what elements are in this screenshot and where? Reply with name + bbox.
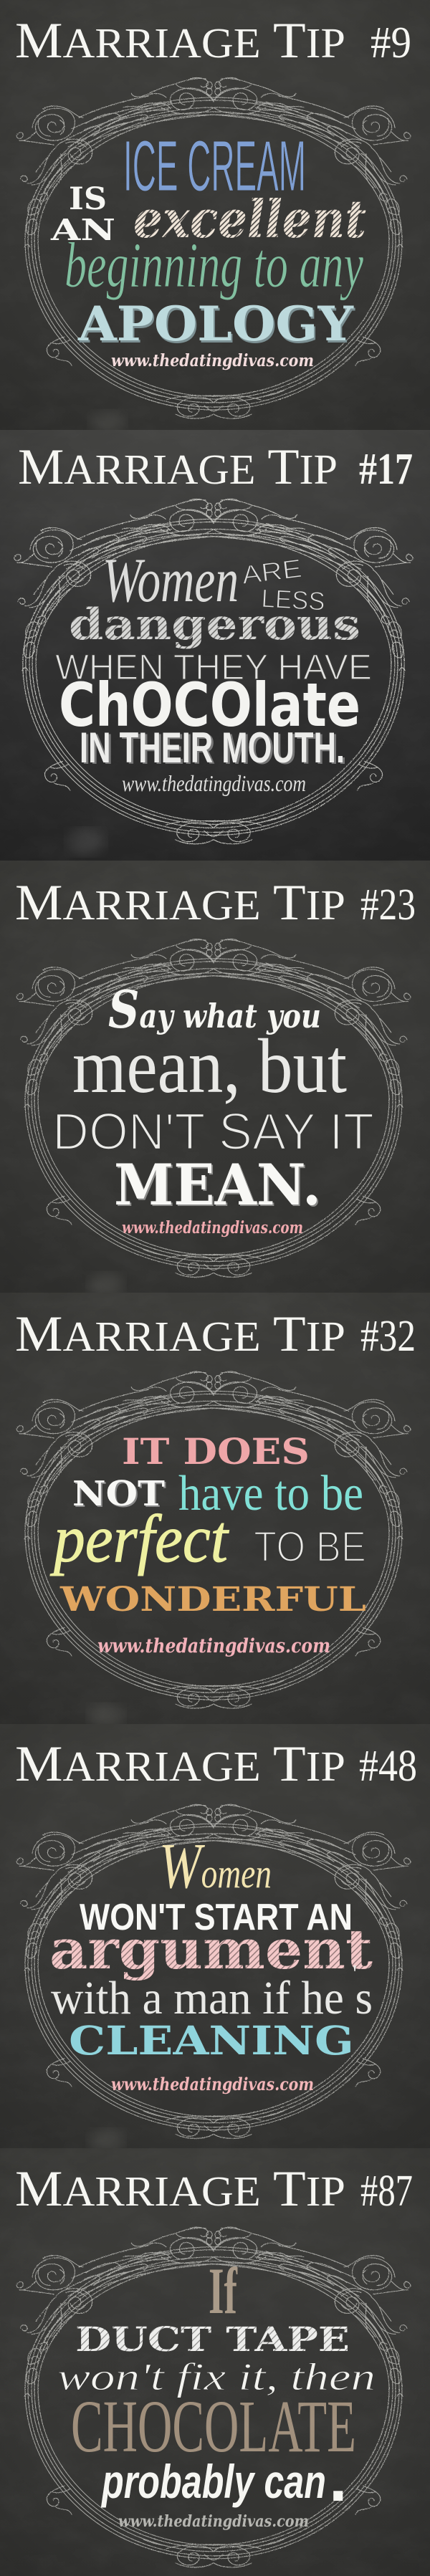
website credit: www.thedatingdivas.com [111, 351, 314, 370]
tip number: #48 [359, 1742, 417, 1791]
quote text: won't fix it, then [57, 2355, 376, 2398]
ornate chalk frame [16, 1371, 411, 1708]
quote text: TO BE [254, 1523, 366, 1571]
quote text: have to be [178, 1466, 363, 1521]
quote text: ChOCOlate [59, 670, 360, 740]
ornate chalk frame [16, 939, 411, 1277]
quote text: ARE [240, 553, 303, 590]
quote text: Women [159, 1831, 272, 1902]
chalkboard background [0, 861, 430, 1296]
quote text: NOT [72, 1474, 165, 1514]
chalkboard background [0, 2148, 430, 2576]
panel: marriage tip 17 [0, 430, 430, 861]
quote text: WONDERFUL [59, 1580, 366, 1619]
quote text: AN [50, 213, 115, 247]
quote text: DUCT TAPE [75, 2320, 350, 2360]
chalkboard background [0, 1293, 430, 1728]
quote text: . [329, 2442, 348, 2515]
quote text [49, 1831, 373, 2064]
website credit: www.thedatingdivas.com [122, 1218, 303, 1237]
quote text: CLEANING [69, 2017, 354, 2064]
website credit: www.thedatingdivas.com [111, 2074, 314, 2094]
quote text: ' [353, 1960, 357, 1987]
tip number: #32 [360, 1312, 416, 1361]
quote text [55, 546, 372, 772]
heading: MARRIAGE TIP [15, 13, 345, 69]
website credit: www.thedatingdivas.com [118, 2512, 309, 2531]
quote text: probably can [100, 2455, 326, 2508]
quote text: DON'T SAY IT [52, 1103, 374, 1161]
chalkboard background [0, 1724, 430, 2153]
heading: MARRIAGE TIP [15, 1736, 345, 1792]
quote text: perfect [49, 1502, 229, 1576]
quote text [52, 979, 374, 1218]
chalkboard background [0, 430, 430, 861]
quote text: LESS [261, 583, 326, 616]
heading: MARRIAGE TIP [15, 1306, 345, 1362]
ornate chalk frame [16, 77, 411, 418]
quote text: WON'T START AN [80, 1897, 353, 1938]
panel: marriage tip 32 [0, 1293, 430, 1728]
quote text: IS [69, 181, 107, 217]
quote text: with a man if he s [51, 1972, 373, 2024]
quote text: MEAN. [114, 1151, 321, 1218]
heading: MARRIAGE TIP [15, 875, 345, 931]
quote text: dangerous [69, 600, 360, 650]
quote text: IT DOES [122, 1430, 310, 1473]
heading: MARRIAGE TIP [15, 2161, 345, 2217]
ornate chalk frame [16, 2227, 411, 2567]
website credit: www.thedatingdivas.com [122, 770, 306, 796]
quote text: mean, but [72, 1024, 347, 1109]
tip number: #9 [371, 19, 411, 67]
heading: MARRIAGE TIP [18, 439, 338, 495]
panel: marriage tip 23 [0, 861, 430, 1296]
website credit: www.thedatingdivas.com [97, 1635, 330, 1657]
panel: marriage tip 87 [0, 2148, 430, 2576]
quote text [49, 1430, 366, 1619]
ornate chalk frame [16, 1804, 411, 2138]
tip number: #87 [360, 2167, 413, 2216]
quote text [57, 2254, 376, 2515]
quote text: If [209, 2254, 238, 2327]
quote text: WHEN THEY HAVE [55, 647, 372, 687]
quote text [50, 126, 366, 352]
quote text: Say what you [108, 979, 321, 1040]
quote text: Women [102, 546, 239, 616]
chalkboard background [0, 0, 430, 434]
tip number: #23 [360, 881, 416, 929]
ornate chalk frame [14, 499, 413, 844]
quote text: argument [49, 1917, 373, 1981]
quote text: APOLOGY [77, 296, 354, 352]
panel: marriage tip 9 [0, 0, 430, 434]
panel: marriage tip 48 [0, 1724, 430, 2153]
tip number: #17 [359, 445, 413, 494]
quote text: excellent [133, 188, 366, 249]
